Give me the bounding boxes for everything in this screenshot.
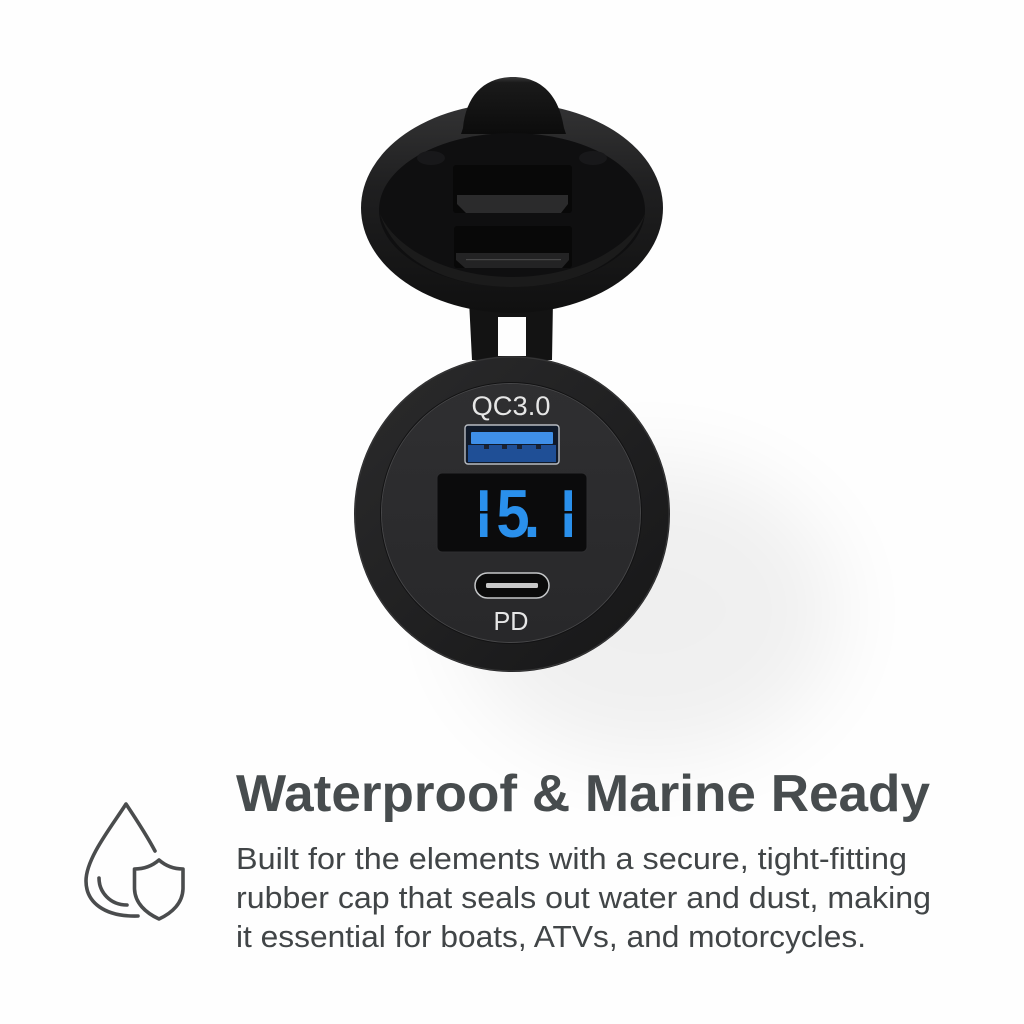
- body text: Built for the elements with a secure, tight-fitting: [236, 841, 907, 876]
- body text: [236, 841, 931, 954]
- icon: water drop with shield: [86, 804, 183, 919]
- heading: Waterproof & Marine Ready: [236, 765, 930, 823]
- USB-A port: [465, 425, 559, 464]
- body text: it essential for boats, ATVs, and motorcycles.: [236, 919, 866, 954]
- QC3.0 label: QC3.0: [472, 391, 550, 421]
- body text: rubber cap that seals out water and dust, making: [236, 880, 931, 915]
- USB-C port: [475, 573, 549, 598]
- voltage display: [437, 473, 587, 552]
- charger base: [354, 356, 670, 672]
- upper cap plug: [453, 165, 572, 213]
- lower cap plug: [454, 226, 572, 268]
- rubber cap strap: [469, 300, 553, 360]
- charger product illustration: [354, 77, 670, 672]
- rubber cap: [361, 77, 663, 313]
- display reading: 15.1: [466, 475, 583, 552]
- PD label: PD: [494, 606, 528, 636]
- drop shadow behind charger: [460, 460, 840, 760]
